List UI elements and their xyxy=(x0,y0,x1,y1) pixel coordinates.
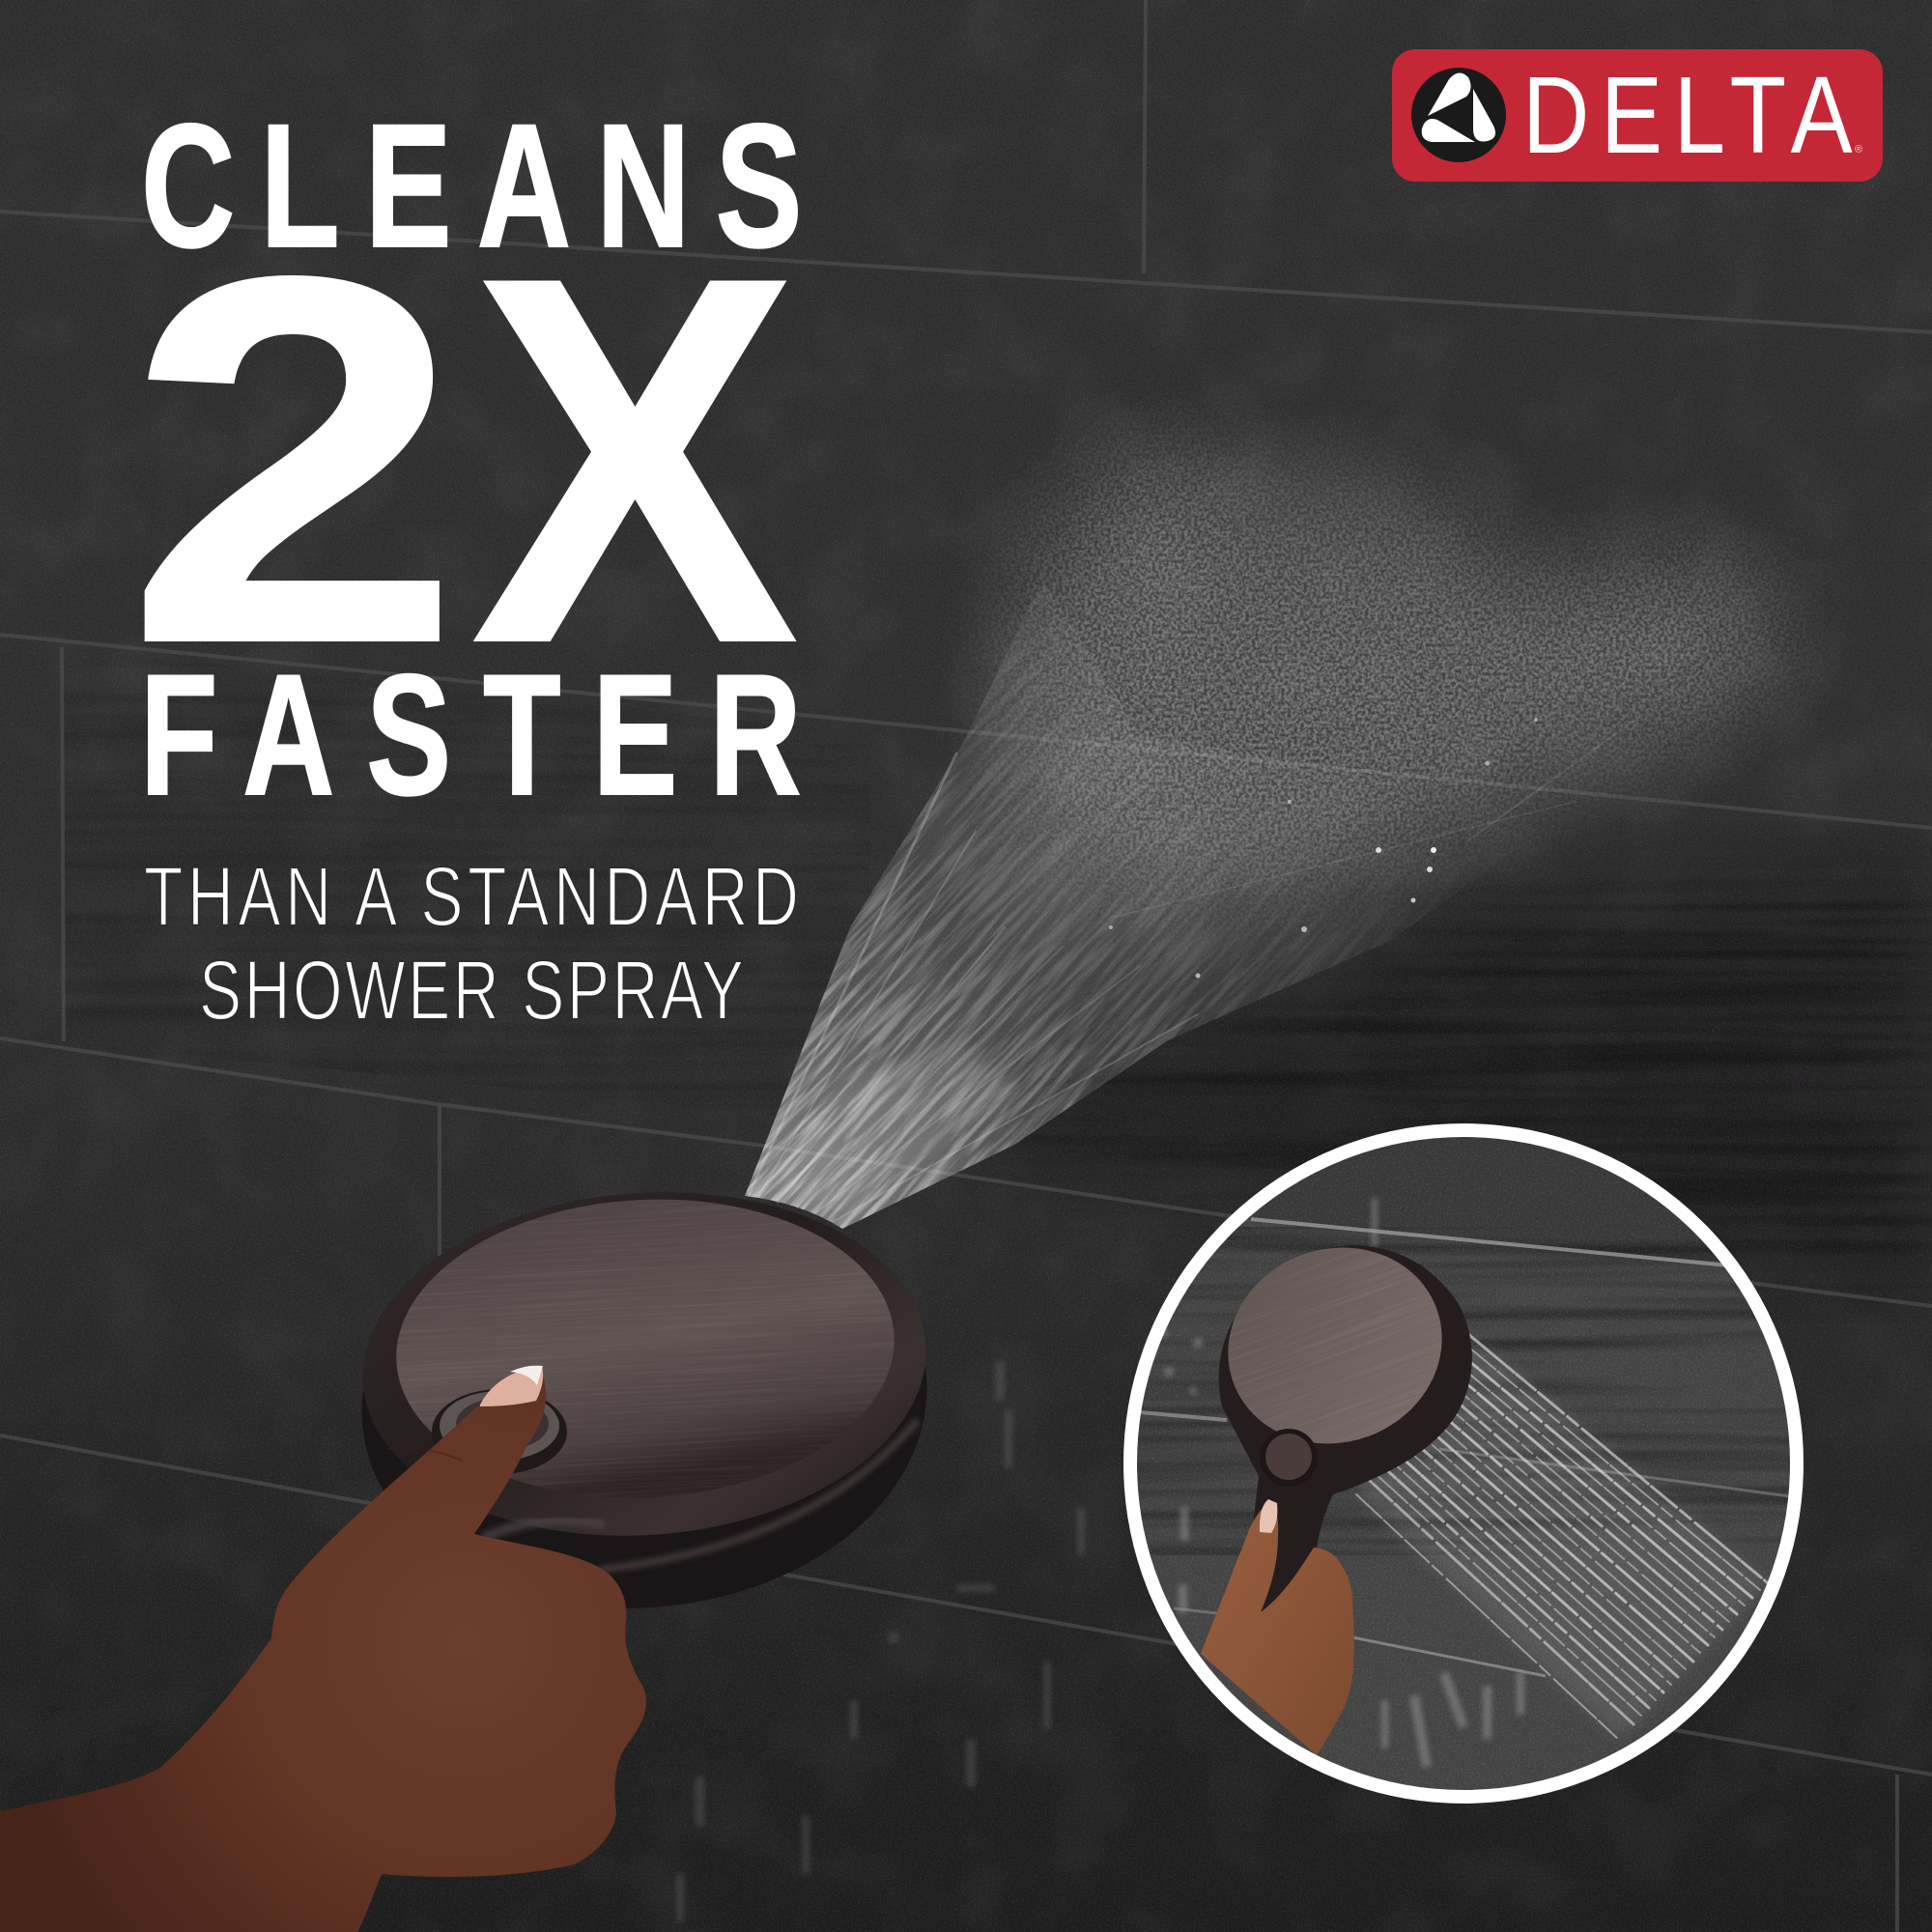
thumb crease xyxy=(386,1448,462,1461)
large hand shower head xyxy=(344,1170,945,1632)
delta logo xyxy=(1392,49,1883,182)
head face xyxy=(388,1187,902,1510)
small head face xyxy=(1201,1218,1469,1473)
inset circle: hand shower spraying the wall xyxy=(1121,1121,1806,1806)
head rim xyxy=(351,1174,938,1554)
headline xyxy=(125,87,802,832)
small hand xyxy=(1201,1501,1354,1755)
soft mist haze xyxy=(976,454,1768,966)
water streams xyxy=(1356,1335,1767,1740)
inset background and clipped content xyxy=(1121,1121,1806,1806)
subheading xyxy=(144,850,799,1037)
dense spray fan xyxy=(745,580,1582,1229)
registered mark: ® xyxy=(1855,144,1862,156)
spray streaks xyxy=(749,715,1642,1222)
inset grout lines xyxy=(1140,1219,1797,1676)
bright spray core xyxy=(773,1043,1024,1212)
brushed metal texture xyxy=(388,1187,902,1510)
small thumb nail xyxy=(1260,1499,1277,1533)
logo wordmark: DELTA xyxy=(1522,55,1853,177)
water stream haze xyxy=(1356,1335,1767,1740)
droplets xyxy=(1109,718,1538,978)
small head body and handle xyxy=(1219,1245,1472,1615)
hand pressing the button xyxy=(0,1366,646,1932)
small head button xyxy=(1260,1429,1318,1487)
headline letter: x: X xyxy=(470,169,802,752)
push button xyxy=(432,1389,567,1474)
thumb nail xyxy=(480,1366,543,1406)
logo red plate xyxy=(1392,49,1883,182)
wall drips xyxy=(1160,1198,1524,1768)
subheading line two: SHOWER SPRAY xyxy=(199,944,744,1037)
water spray from hand shower xyxy=(391,185,1804,1590)
fine mist cloud xyxy=(978,418,1804,940)
rim highlight xyxy=(599,1420,918,1570)
headline word: faster: FASTER xyxy=(140,639,802,832)
headline number: 2: 2 xyxy=(125,169,463,752)
small shower head xyxy=(1201,1218,1472,1615)
inset white ring xyxy=(1130,1130,1797,1797)
headline word: cleans: CLEANS xyxy=(141,87,803,284)
subheading line one: THAN A STANDARD xyxy=(144,850,799,944)
radial water texture xyxy=(745,647,1376,1229)
handle highlight xyxy=(483,1520,604,1538)
hand and wrist xyxy=(0,1372,646,1932)
small head brushed texture xyxy=(1201,1218,1469,1473)
logo emblem xyxy=(1411,68,1506,162)
head body xyxy=(344,1170,945,1632)
